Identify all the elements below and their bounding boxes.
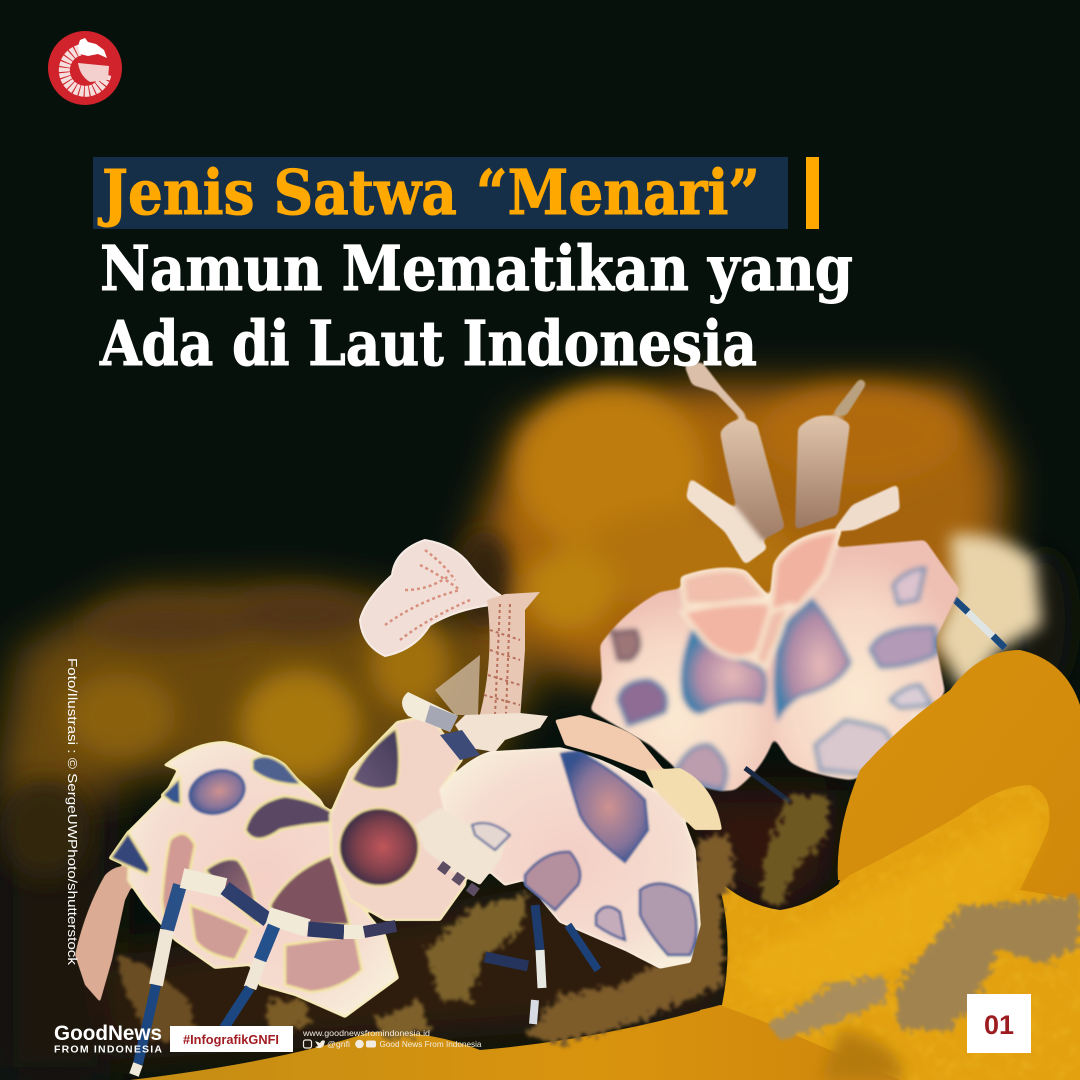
pink folded claw edge: [555, 715, 668, 775]
eye: [402, 692, 480, 760]
title line 3: Ada di Laut Indonesia: [99, 307, 757, 380]
striped walking legs: [134, 865, 598, 1075]
logo ring: [64, 50, 106, 91]
back shrimp: [590, 362, 1042, 802]
algae under right claw: [525, 835, 735, 1045]
title highlight bar: [93, 157, 788, 229]
brand wordmark: [54, 1022, 162, 1056]
small pincer at the centre: [415, 808, 510, 885]
title line 2: Namun Mematikan yang: [100, 232, 853, 305]
right claw spots: [525, 752, 696, 955]
photo credit: Foto/Ilustrasi : © SergeUWPhoto/shutterstock: [65, 658, 79, 966]
tail fan: [75, 866, 140, 1002]
website and social handles: www.goodnewsfromindonesia.id: [302, 1028, 430, 1038]
brand wordmark: FROM INDONESIA: [54, 1044, 162, 1056]
icon: facebook: [355, 1040, 364, 1048]
cream fold: [645, 768, 722, 830]
eye stalk fan: [360, 540, 500, 656]
head spots: [339, 728, 419, 886]
logo eagle head: [78, 38, 107, 58]
small rear leg under back shrimp: [745, 768, 790, 802]
website and social handles: Good News From Indonesia: [380, 1039, 482, 1049]
back shrimp claws: [590, 530, 960, 791]
back shrimp pink fringes: [682, 530, 840, 668]
algae on yellow sponge: [895, 895, 1080, 1030]
front shrimp: [75, 540, 722, 1075]
website and social handles: [302, 1028, 482, 1049]
eye stalks and antennae: [684, 362, 900, 565]
back shrimp left claw: [590, 585, 778, 791]
website and social handles: @gnfi: [327, 1039, 350, 1049]
title line 1: Jenis Satwa “Menari”: [98, 156, 760, 229]
striped rear leg: [953, 598, 1005, 648]
hashtag tag: #InfografikGNFI: [183, 1032, 279, 1047]
eye stalk: [435, 592, 548, 752]
back shrimp legs: [910, 710, 935, 765]
hashtag tag: [170, 1026, 293, 1052]
page number badge: 01: [984, 1010, 1014, 1040]
back shrimp right claw: [772, 540, 960, 780]
orange sponge on the right: [760, 650, 1080, 1080]
algae clumps: [118, 795, 1080, 1045]
algae column between sponges: [762, 795, 828, 905]
logo badge: [48, 31, 122, 105]
front shrimp body: [75, 715, 722, 1017]
logo ring inner bar: [78, 63, 109, 82]
algae under shrimp centre: [425, 892, 530, 1000]
left claw spots: [110, 756, 362, 992]
right claw of front shrimp: [440, 748, 700, 968]
brand wordmark: GoodNews: [54, 1022, 162, 1045]
back shrimp markings: [612, 568, 935, 790]
icon: twitter: [315, 1040, 325, 1048]
page number badge: [967, 994, 1031, 1053]
yellow sponge foreground: [130, 780, 1080, 1080]
icon: instagram: [304, 1040, 312, 1048]
head and middle body: [330, 715, 470, 920]
icon: youtube: [366, 1040, 376, 1048]
cream rear shape: [935, 534, 1042, 695]
left claw upper: [128, 742, 398, 1017]
orange accent bar: [806, 157, 819, 229]
algae under left claw: [118, 955, 195, 1040]
